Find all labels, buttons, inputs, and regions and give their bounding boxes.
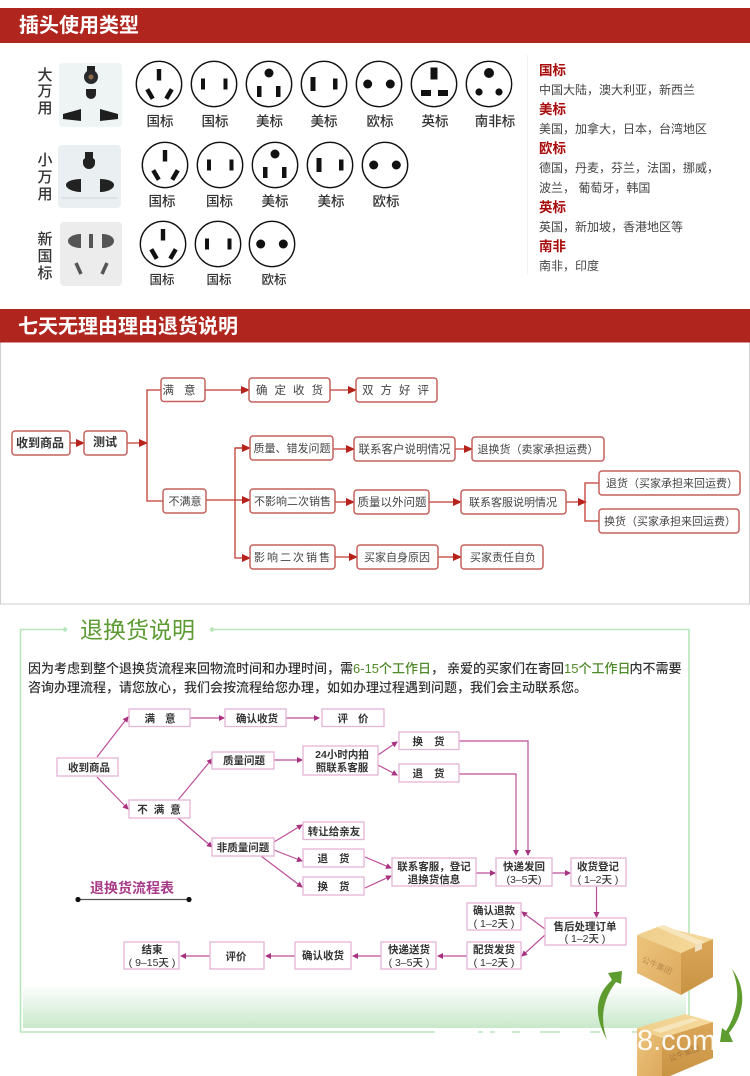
box: 换货: 换货	[318, 880, 360, 893]
icon: plug 美标 two-pin	[307, 142, 353, 209]
icon: plug 美标 three-pin: 美标	[256, 113, 283, 129]
box: 转让给亲友	[303, 822, 364, 840]
icon: plug 美标 two-pin	[301, 61, 347, 129]
box: 结束: ( 9–15天 )	[129, 957, 175, 969]
icon: plug 英标: 英标	[422, 113, 449, 129]
box: 买家自身原因: 买家自身原因	[364, 550, 430, 564]
box: 测试	[84, 431, 127, 455]
box: 转让给亲友: 转让给亲友	[308, 825, 361, 838]
box: 联系客服说明情况	[461, 490, 566, 514]
icon: plug 美标 three-pin	[252, 142, 298, 209]
box: 快递送货: 快递送货	[388, 943, 430, 956]
box: 配货发货	[467, 942, 521, 969]
label: 新国标	[37, 231, 53, 282]
label: 新国标: 新	[37, 231, 53, 248]
box: 不满意: 不满意	[137, 803, 187, 816]
icon: plug 欧标: 欧标	[366, 113, 394, 129]
box: 确认收货: 确认收货	[236, 712, 278, 725]
box: 换货（买家承担来回运费）	[599, 509, 739, 533]
box: 确定收货: 确定收货	[256, 383, 330, 397]
icon: plug 国标 two-pin: 国标	[202, 114, 229, 129]
box: 确认收货	[225, 709, 286, 726]
label: 小万用: 万	[37, 169, 53, 186]
box: 快递发回: 快递发回	[503, 860, 545, 873]
box: 买家自身原因	[357, 545, 438, 569]
box: 退货	[399, 764, 459, 782]
heading bar: plug types	[0, 8, 750, 43]
label: 小万用: 用	[37, 186, 53, 203]
box: 退货: 退货	[412, 767, 456, 780]
box: 快递送货	[381, 942, 436, 969]
heading bar: seven-day return: 七天无理由理由退货说明	[18, 314, 238, 338]
legend: countries per standard: 德国，丹麦，芬兰，法国，挪威，	[539, 160, 719, 175]
box: 收到商品	[12, 431, 70, 455]
icon: small universal socket photo	[58, 145, 121, 208]
icon: plug 美标 three-pin	[246, 61, 292, 129]
box: 收货登记: ( 1–2天 )	[578, 874, 618, 886]
heading bar: plug types: 插头使用类型	[19, 14, 139, 37]
box: 评价: 评价	[338, 712, 378, 725]
box: 换货: 换货	[412, 735, 456, 748]
icon: plug 国标 three-pin: 国标	[148, 194, 176, 209]
box: 收货登记	[571, 858, 626, 886]
box: 收到商品	[57, 758, 118, 776]
heading: 退换货说明: 退换货说明	[80, 617, 195, 643]
label: 大万用	[37, 67, 53, 117]
icon: green cycle arrow left	[598, 971, 622, 1040]
box: 联系客服，登记退换货信息	[392, 858, 476, 886]
box: 双方好评	[356, 378, 437, 402]
box: 确认退款: 确认退款	[473, 904, 515, 917]
box: 测试: 测试	[93, 434, 117, 449]
legend: countries per standard: 欧标	[539, 140, 566, 156]
icon: plug 欧标: 欧标	[372, 193, 400, 209]
panel: exchange and return explanation	[20, 617, 689, 1032]
box: 结束: 结束	[142, 943, 163, 956]
icon: plug 国标 two-pin: 国标	[206, 194, 233, 209]
box: 收到商品: 收到商品	[68, 761, 110, 774]
box: 质量以外问题	[354, 490, 429, 514]
box: 换货（买家承担来回运费）: 换货（买家承担来回运费）	[604, 514, 736, 528]
icon: plug 欧标: 欧标	[261, 272, 287, 287]
box: 24小时内拍照联系客服: 24小时内拍	[315, 748, 369, 761]
icon: plug 英标	[411, 61, 457, 129]
text block: intro: 因为考虑到整个退换货流程来回物流时间和办理时间，需6-15个工作日	[28, 661, 431, 676]
box: 确认退款: ( 1–2天 )	[474, 918, 514, 930]
box: 不满意: 不满意	[168, 494, 202, 508]
box: 联系客服说明情况: 联系客服说明情况	[469, 495, 557, 509]
icon: plug 国标 three-pin	[140, 221, 186, 287]
box: 换货	[303, 877, 364, 895]
box: 快递送货: ( 3–5天 )	[389, 957, 429, 969]
label: 大万用: 万	[37, 83, 53, 100]
icon: green cycle arrow right	[720, 969, 742, 1042]
icon: plug 国标 three-pin	[142, 142, 188, 209]
heading bar: seven-day return	[0, 309, 750, 342]
box: 退货	[303, 849, 364, 867]
icon: plug 国标 three-pin: 国标	[149, 272, 175, 287]
box: 质量问题: 质量问题	[223, 754, 265, 767]
box: 收货登记: 收货登记	[577, 860, 619, 873]
icon: plug 欧标	[362, 142, 408, 209]
legend: countries per standard	[539, 63, 719, 273]
icon: plug 国标 two-pin: 国标	[206, 272, 232, 287]
legend: countries per standard: 英国，新加坡，香港地区等	[539, 219, 683, 234]
box: 确认收货: 确认收货	[302, 949, 344, 962]
box: 满意	[161, 378, 206, 402]
icon: plug 国标 three-pin	[136, 61, 182, 129]
box: 快递发回: (3–5天)	[506, 874, 542, 886]
icon: plug 南非标	[466, 61, 516, 129]
text block: intro: 咨询办理流程，请您放心，我们会按流程给您办理，如如办理过程遇到问题，我们会主动联系您。	[28, 680, 587, 695]
icon: plug 美标 two-pin: 美标	[310, 113, 338, 129]
box: 不影响二次销售: 不影响二次销售	[254, 494, 331, 508]
legend: countries per standard: 中国大陆，澳大利亚，新西兰	[539, 82, 695, 97]
text block: intro: 15个工作日	[564, 661, 630, 676]
box: 联系客服，登记退换货信息: 联系客服，登记	[397, 860, 471, 873]
box: 满意: 满意	[162, 383, 206, 397]
icon: new standard socket photo	[60, 222, 122, 286]
legend: countries per standard: 波兰， 葡萄牙，韩国	[539, 180, 650, 195]
icon: plug 美标 two-pin: 美标	[318, 193, 345, 209]
label: 新国标: 国	[37, 248, 53, 265]
box: 双方好评: 双方好评	[362, 383, 436, 397]
box: 退换货（卖家承担运费）: 退换货（卖家承担运费）	[478, 442, 598, 456]
box: 非质量问题	[212, 838, 274, 856]
box: 不满意	[129, 800, 190, 818]
label: 新国标: 标	[37, 265, 53, 282]
row: small universal socket	[37, 142, 408, 209]
box: 不影响二次销售	[250, 489, 335, 513]
box: 退货（买家承担来回运费）	[599, 471, 740, 495]
icon: top carton: 公牛集团	[641, 954, 674, 976]
legend: countries per standard: 南非，印度	[539, 258, 599, 273]
label: 小万用: 小	[37, 152, 53, 169]
box: 售后处理订单: ( 1–2天 )	[565, 933, 605, 945]
row: new national standard socket	[37, 221, 295, 287]
legend: countries per standard: 南非	[539, 239, 566, 254]
icon: plug 欧标	[356, 61, 402, 129]
box: 24小时内拍照联系客服: 照联系客服	[316, 761, 369, 774]
box: 售后处理订单: 售后处理订单	[554, 920, 617, 933]
label: 大万用: 大	[37, 67, 53, 84]
box: 配货发货: ( 1–2天 )	[474, 957, 514, 969]
box: 结束	[124, 942, 179, 969]
box: 配货发货: 配货发货	[473, 943, 515, 956]
box: 快递发回	[496, 858, 552, 886]
icon: top carton	[637, 925, 713, 995]
box: 确认收货	[295, 942, 351, 969]
legend: countries per standard: 英标	[539, 199, 566, 215]
box: 24小时内拍照联系客服	[303, 746, 378, 775]
caption: 退换货流程表: 退换货流程表	[90, 880, 174, 896]
box: 联系客户说明情况: 联系客户说明情况	[358, 442, 451, 456]
icon: bottom carton	[637, 1014, 713, 1076]
icon: large universal socket photo	[59, 63, 122, 127]
text block: intro: 内不需要	[630, 661, 682, 676]
text block: intro: ，	[431, 661, 444, 676]
box: 确定收货	[249, 378, 330, 402]
icon: bottom carton: 公牛集团	[667, 1043, 701, 1063]
box: 评价	[210, 942, 264, 969]
icon: plug 国标 two-pin	[195, 221, 241, 287]
box: 退换货（卖家承担运费）	[472, 437, 604, 461]
box: 非质量问题: 非质量问题	[217, 841, 270, 854]
box: 不满意	[163, 489, 206, 513]
box: 退货（买家承担来回运费）: 退货（买家承担来回运费）	[606, 476, 738, 490]
box: 售后处理订单	[545, 918, 626, 945]
legend: countries per standard: 美标	[539, 101, 566, 117]
text block: intro	[28, 661, 682, 695]
box: 联系客户说明情况	[354, 437, 455, 461]
box: 质量、错发问题: 质量、错发问题	[254, 441, 330, 455]
box: 质量问题	[212, 752, 274, 769]
icon: plug 国标 three-pin: 国标	[146, 114, 174, 129]
box: 满意	[129, 709, 190, 726]
watermark: 8.com: 8.com	[637, 1025, 716, 1057]
caption: 退换货流程表	[75, 880, 192, 902]
box: 退货: 退货	[318, 852, 360, 865]
box: 影响二次销售: 影响二次销售	[254, 550, 332, 564]
box: 质量、错发问题	[250, 436, 333, 460]
icon: plug 美标 three-pin: 美标	[262, 193, 289, 209]
box: 影响二次销售	[250, 545, 335, 569]
text block: intro: 亲爱的买家们在寄回	[447, 661, 564, 676]
box: 联系客服，登记退换货信息: 退换货信息	[408, 873, 461, 886]
panel: plug types	[0, 8, 750, 287]
connectors: red flow lines	[70, 390, 599, 558]
connectors: magenta flow lines	[97, 717, 596, 956]
box: 评价: 评价	[226, 950, 247, 963]
box: 评价	[322, 709, 384, 726]
box: 换货	[399, 732, 459, 750]
legend: countries per standard: 国标	[539, 63, 566, 78]
box: 满意: 满意	[144, 712, 186, 725]
panel: seven-day return flow	[0, 309, 750, 604]
box: 收到商品: 收到商品	[16, 435, 64, 450]
label: 大万用: 用	[37, 100, 53, 117]
icon: plug 国标 two-pin	[191, 61, 237, 129]
label: 小万用	[37, 152, 53, 203]
legend: countries per standard: 美国，加拿大，日本，台湾地区	[539, 121, 707, 136]
row: large universal socket	[37, 61, 516, 129]
box: 买家责任自负: 买家责任自负	[470, 550, 536, 564]
box: 买家责任自负	[461, 545, 543, 569]
icon: plug 南非标: 南非标	[475, 114, 516, 129]
box: 质量以外问题: 质量以外问题	[358, 496, 427, 509]
box: 确认退款	[467, 903, 521, 930]
icon: plug 欧标	[249, 221, 295, 287]
icon: plug 国标 two-pin	[197, 142, 243, 209]
